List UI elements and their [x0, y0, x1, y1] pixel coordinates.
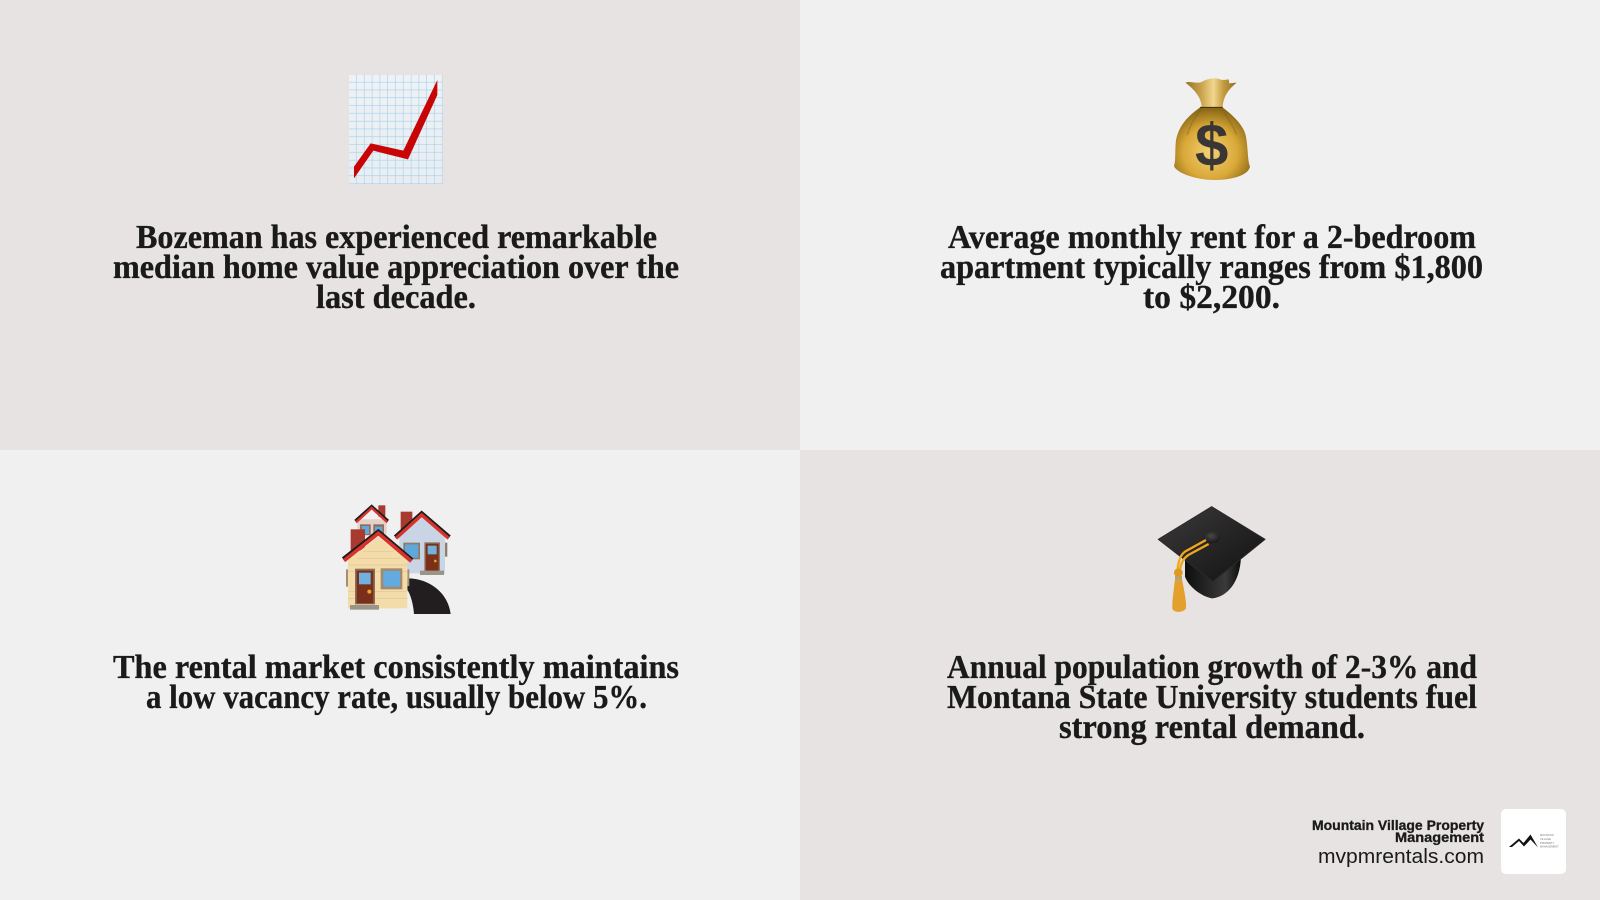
icon: money bag: [1174, 78, 1250, 180]
text: home value statement: median home value appreciation over the: [113, 249, 679, 286]
text: logo wordmark: PROPERTY: [1540, 841, 1554, 845]
text: logo wordmark: VILLAGE: [1540, 837, 1551, 841]
text: vacancy statement: [113, 649, 679, 716]
text: company name and website: Mountain Village Property: [1312, 817, 1484, 833]
text: population statement: [947, 649, 1477, 746]
icon: money bag: $: [1195, 112, 1228, 179]
panel: vacancy rate: [0, 450, 800, 900]
text: home value statement: [113, 219, 679, 316]
logo card: [1501, 809, 1566, 874]
text: population statement: strong rental demand.: [1059, 709, 1365, 746]
text: population statement: Annual population growth of 2-3% and: [947, 649, 1477, 686]
text: rent statement: [940, 219, 1483, 316]
text: company name and website: Management: [1395, 829, 1484, 845]
branding: company footer: [1312, 809, 1566, 874]
text: logo wordmark: MOUNTAIN: [1540, 833, 1554, 837]
icon: graduation cap: [1158, 507, 1265, 612]
icon: houses: [343, 505, 451, 614]
icon: mountains: [1509, 834, 1538, 848]
panel: average rent: [800, 0, 1600, 450]
text: vacancy statement: a low vacancy rate, usually below 5%.: [146, 679, 647, 716]
panel: population growth: [800, 450, 1600, 900]
text: population statement: Montana State University students fuel: [947, 679, 1477, 716]
text: logo wordmark: [1540, 833, 1559, 848]
text: vacancy statement: The rental market consistently maintains: [113, 649, 679, 686]
text: home value statement: last decade.: [316, 279, 476, 316]
text: company name and website: [1312, 817, 1484, 868]
text: rent statement: Average monthly rent for a 2-bedroom: [948, 219, 1476, 256]
text: logo wordmark: MANAGEMENT: [1540, 844, 1559, 848]
panel: home value appreciation: [0, 0, 800, 450]
text: company name and website: mvpmrentals.com: [1318, 846, 1484, 868]
text: rent statement: apartment typically ranges from $1,800: [940, 249, 1483, 286]
text: rent statement: to $2,200.: [1143, 279, 1280, 316]
text: home value statement: Bozeman has experienced remarkable: [136, 219, 657, 256]
icon: chart with upward trend: [349, 75, 443, 184]
